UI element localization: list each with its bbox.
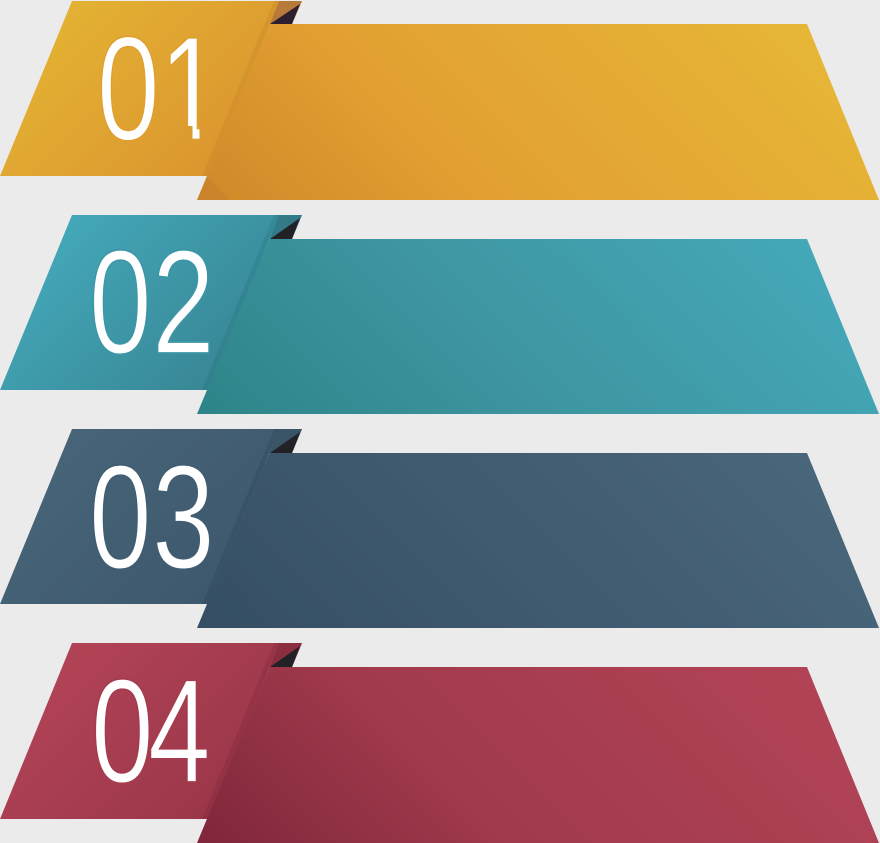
fold shadow 02 <box>202 215 279 390</box>
panel 01 <box>197 24 879 200</box>
panel 02 <box>197 239 879 414</box>
fold shadow 04 <box>202 643 279 819</box>
fold corner 03 <box>270 429 302 453</box>
panel 03 <box>197 453 879 628</box>
tab 02 <box>0 215 302 390</box>
ribbon 02 <box>0 215 879 414</box>
ribbon 03 <box>0 429 879 628</box>
fold corner 04 <box>270 643 302 667</box>
fold shadow 01 <box>202 1 279 176</box>
ribbon 04 <box>0 643 879 843</box>
fold shadow 03 <box>202 429 279 604</box>
fold corner 02 <box>270 215 302 239</box>
number 03: 03 <box>89 434 215 600</box>
tab 03 <box>0 429 302 604</box>
ribbon 01 <box>0 1 879 200</box>
number 04: 04 <box>91 648 211 814</box>
fold corner 01 <box>270 1 302 24</box>
tab 01 <box>0 1 302 176</box>
tab 04 <box>0 643 302 819</box>
corner shading 01 <box>197 176 230 200</box>
number 01: 01 <box>97 6 222 171</box>
number 02: 02 <box>89 219 215 385</box>
panel 04 <box>197 667 879 843</box>
